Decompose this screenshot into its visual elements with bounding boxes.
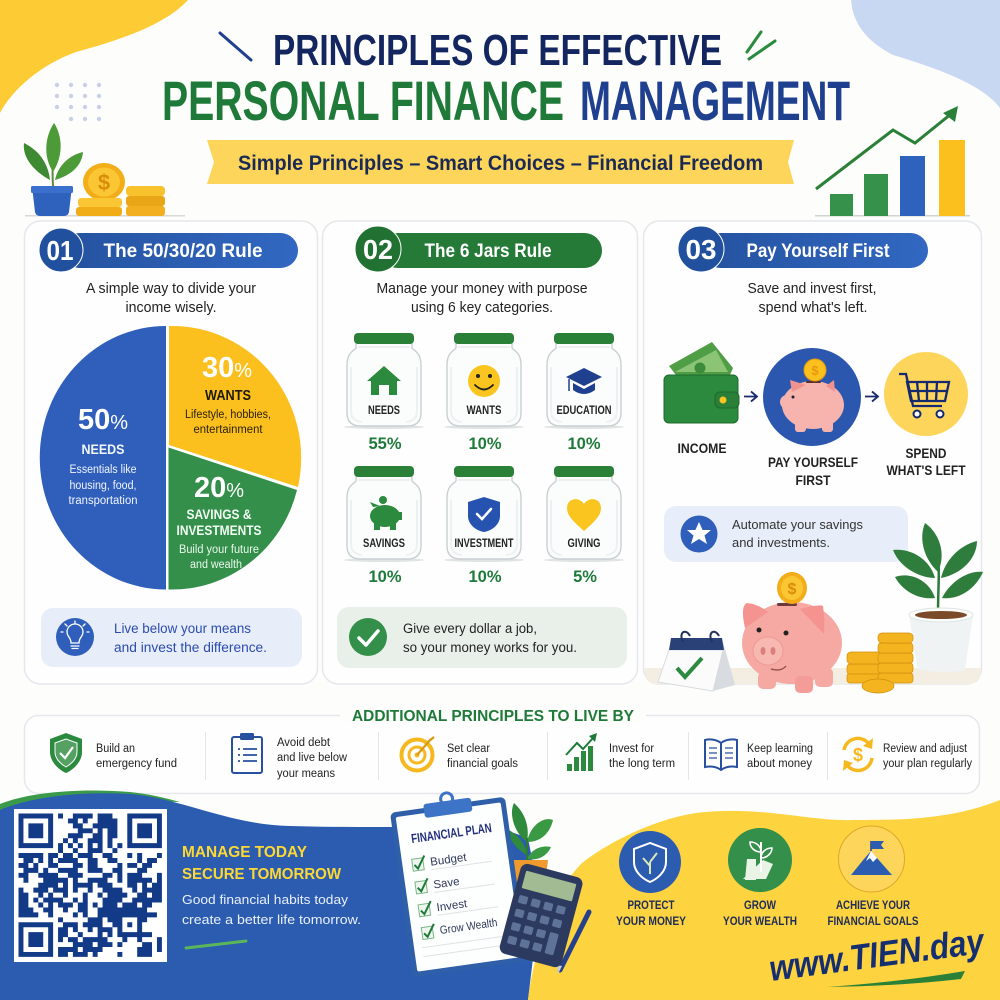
footer yellow wave [528, 800, 1000, 1000]
item: long term [566, 733, 675, 771]
illustration: plant in white pot [893, 523, 983, 672]
jar: savings [344, 466, 424, 586]
description: spend what's left. [758, 300, 868, 316]
jar: savings: 10% [368, 568, 402, 586]
checklist: Budget [430, 852, 468, 869]
subtitle ribbon: Simple Principles – Smart Choices – Financial Freedom [238, 152, 763, 175]
label: income: INCOME [678, 440, 726, 456]
illustration: clipboard financial plan: FINANCIAL PLAN [410, 820, 493, 846]
jar: wants [444, 333, 524, 453]
title line 2 blue: MANAGEMENT [580, 69, 850, 132]
jar: giving: 5% [573, 568, 597, 586]
tip box: Automate your savings [732, 517, 863, 532]
badge: achieve your financial goals [828, 826, 918, 928]
checklist [409, 846, 504, 957]
title accent navy stroke [220, 33, 251, 60]
item: long term: the long term [609, 758, 675, 770]
jar: needs: 55% [368, 435, 402, 453]
tip box [664, 506, 908, 562]
title line 2 green: PERSONAL FINANCE [162, 69, 564, 132]
illustration: clipboard financial plan [388, 785, 528, 977]
wants slice [169, 326, 301, 487]
jar: giving [544, 466, 624, 586]
jar: investment: INVESTMENT [454, 538, 514, 550]
tip box: Live below your means [114, 621, 251, 636]
jar: needs [344, 333, 424, 453]
needs slice [40, 326, 166, 590]
item: emergency fund: Build an [96, 743, 135, 755]
tip box: and invest the difference. [114, 640, 267, 655]
illustration: plant and coins: $ [98, 170, 110, 195]
description: income wisely. [126, 300, 216, 316]
illustration: small plant behind clipboard [505, 803, 553, 892]
description: A simple way to divide your [86, 281, 256, 297]
item: review plan [843, 738, 972, 771]
jar: education [544, 333, 624, 453]
needs slice: 50% [78, 404, 128, 436]
tip box: Give every dollar a job, [403, 621, 537, 636]
dotted decoration [55, 83, 101, 121]
item: keep learning [705, 739, 813, 770]
item: keep learning: about money [747, 758, 812, 770]
icon: piggy bank in blue circle [763, 348, 861, 446]
header pill [678, 226, 928, 272]
illustration: plant and coins [24, 123, 185, 216]
jar: giving: GIVING [568, 538, 601, 550]
needs slice: housing, food, [70, 480, 136, 492]
needs slice: NEEDS [82, 441, 124, 457]
blue corner blob [851, 0, 1000, 108]
pie chart [40, 326, 301, 590]
footer blue wave [0, 793, 540, 1000]
item: clear goals: Set clear [447, 743, 490, 755]
description [748, 281, 876, 316]
item: review plan: your plan regularly [883, 758, 972, 770]
item: avoid debt [232, 733, 348, 780]
wants slice: 30% [202, 352, 252, 384]
wants slice: Lifestyle, hobbies, [185, 409, 271, 421]
needs slice: Essentials like [70, 464, 136, 476]
jar: savings: SAVINGS [363, 538, 405, 550]
item: avoid debt: your means [277, 768, 335, 780]
icon: piggy bank in blue circle: $ [811, 363, 819, 378]
jar: wants: WANTS [466, 405, 502, 417]
icon: shopping cart in yellow circle [884, 352, 968, 436]
footer message: create a better life tomorrow. [182, 912, 361, 927]
item: avoid debt: Avoid debt [277, 737, 331, 749]
description [376, 281, 588, 316]
header pill: The 50/30/20 Rule [104, 241, 262, 262]
wants slice: WANTS [205, 388, 251, 404]
label: pay yourself first: FIRST [796, 472, 831, 488]
yellow corner blob [0, 0, 188, 113]
additional principles section [24, 708, 980, 794]
savings slice: 20% [194, 472, 244, 504]
jar: investment: 10% [468, 568, 502, 586]
footer message: SECURE TOMORROW [182, 866, 342, 883]
illustration: large piggy bank: $ [788, 581, 797, 598]
panel 1: the 50/30/20 rule [24, 221, 318, 684]
wants slice: entertainment [194, 424, 263, 436]
label: spend what's left: WHAT'S LEFT [886, 462, 966, 478]
QR code [14, 809, 167, 962]
illustration: coin stacks [847, 633, 913, 693]
savings slice [168, 448, 297, 590]
savings slice: Build your future [179, 544, 259, 556]
illustration: calendar with check [658, 632, 735, 691]
item: clear goals [402, 737, 518, 770]
checklist: Invest [436, 898, 469, 914]
item: keep learning: Keep learning [747, 743, 813, 755]
panel 2: the 6 jars rule [322, 221, 638, 684]
tip box [41, 608, 302, 667]
footer message [182, 844, 361, 948]
header pill: The 6 Jars Rule [424, 241, 552, 262]
header pill [39, 228, 298, 272]
title line 1: PRINCIPLES OF EFFECTIVE [273, 26, 722, 75]
badge: grow your wealth: GROW [744, 898, 777, 912]
item: review plan: Review and adjust [883, 743, 968, 755]
badge: achieve your financial goals: ACHIEVE YOUR [836, 898, 910, 912]
jar: education: 10% [567, 435, 601, 453]
tip box [337, 607, 627, 668]
footer message: MANAGE TODAY [182, 844, 307, 861]
header pill: 03 [686, 234, 716, 265]
item: review plan: $ [853, 745, 863, 765]
tip box: and investments. [732, 535, 830, 550]
label: pay yourself first: PAY YOURSELF [768, 454, 858, 470]
title [162, 26, 850, 132]
badge: protect your money: PROTECT [628, 898, 675, 912]
item: long term: Invest for [609, 743, 654, 755]
jar: investment [444, 466, 524, 586]
checklist: Save [433, 876, 460, 891]
header pill: 01 [46, 235, 74, 266]
badge: grow your wealth [723, 828, 797, 928]
item: clear goals: financial goals [447, 758, 518, 770]
arrow: pay yourself to spend [865, 392, 878, 402]
arrow: income to pay yourself [744, 392, 757, 402]
item: emergency fund [50, 733, 177, 773]
badge: protect your money [616, 831, 686, 928]
header pill [355, 226, 602, 272]
checklist: Grow Wealth [439, 917, 498, 937]
icon: wallet with cash [664, 342, 739, 423]
footer green edge [0, 790, 180, 812]
header pill: Pay Yourself First [746, 241, 890, 262]
logo underline swoosh [827, 971, 965, 987]
label: spend what's left [886, 445, 966, 478]
description: Manage your money with purpose [376, 281, 588, 297]
jar: needs: NEEDS [368, 405, 400, 417]
description: Save and invest first, [748, 281, 876, 297]
description [86, 281, 256, 316]
needs slice: transportation [68, 495, 138, 507]
title accent green strokes [747, 32, 775, 59]
panel 3: pay yourself first [644, 221, 983, 693]
label: spend what's left: SPEND [906, 445, 946, 461]
label: pay yourself first [768, 454, 858, 488]
item: emergency fund: emergency fund [96, 758, 177, 770]
badge: grow your wealth: YOUR WEALTH [723, 914, 797, 928]
subtitle ribbon [207, 140, 794, 184]
illustration: ground band [645, 668, 981, 684]
illustration: calculator and pen [498, 862, 589, 974]
jar: education: EDUCATION [556, 405, 612, 417]
savings slice: and wealth [190, 559, 242, 571]
badge: protect your money: YOUR MONEY [616, 914, 686, 928]
illustration: growth bar chart [815, 106, 970, 216]
illustration: large piggy bank [742, 572, 842, 693]
savings slice: SAVINGS & [186, 506, 252, 522]
footer message: Good financial habits today [182, 892, 349, 907]
section heading: ADDITIONAL PRINCIPLES TO LIVE BY [352, 708, 634, 725]
badge: achieve your financial goals: FINANCIAL GOALS [828, 914, 918, 928]
header pill: 02 [363, 234, 393, 265]
jar: wants: 10% [468, 435, 502, 453]
description: using 6 key categories. [411, 300, 553, 316]
item: avoid debt: and live below [277, 752, 348, 764]
savings slice: INVESTMENTS [176, 522, 262, 538]
tip box: so your money works for you. [403, 640, 577, 655]
